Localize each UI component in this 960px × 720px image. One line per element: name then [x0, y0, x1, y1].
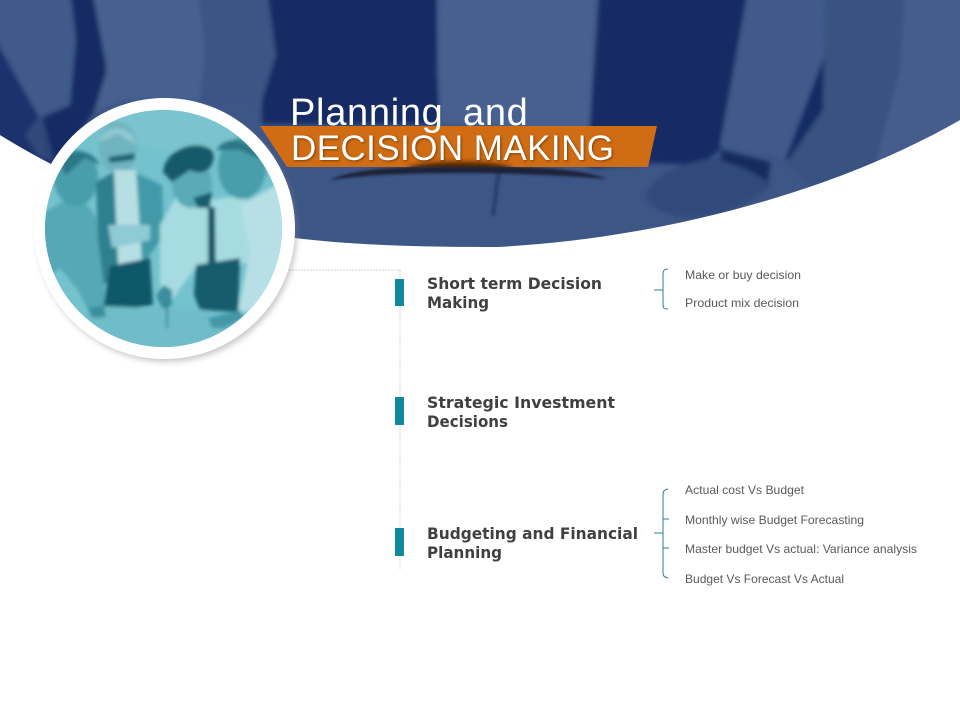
item 3: budgeting and financial planning: Budgeting and Financial [427, 524, 638, 543]
item 3: budgeting and financial planning [395, 524, 638, 562]
sub-items 3: Master budget Vs actual: Variance analysis [685, 542, 917, 556]
left man [45, 201, 106, 310]
sub-items 1: Product mix decision [685, 296, 799, 310]
title text: DECISION MAKING [291, 129, 614, 168]
bracket 3 [654, 489, 669, 578]
centre dark figure [262, 0, 440, 124]
left paper [0, 0, 78, 115]
item 2: strategic investment decisions: Decisions [427, 412, 508, 431]
woman [99, 122, 137, 174]
item 2: strategic investment decisions [395, 393, 615, 431]
item 1: short term decision making: Short term Decision [427, 274, 602, 293]
right dark figure [590, 0, 748, 168]
sub-items 1 [685, 268, 801, 310]
sleeve [720, 0, 825, 158]
sub-items 3 [685, 483, 917, 586]
sub-items 1: Make or buy decision [685, 268, 801, 282]
sub-items 3: Monthly wise Budget Forecasting [685, 513, 864, 527]
sub-items 3: Budget Vs Forecast Vs Actual [685, 572, 844, 586]
item 1: short term decision making: Making [427, 293, 489, 312]
table [85, 306, 230, 350]
item 3: budgeting and financial planning: Planning [427, 543, 502, 562]
item 2: strategic investment decisions: Strategic Investment [427, 393, 615, 412]
banner photo background [0, 0, 960, 260]
connector lines [280, 270, 400, 570]
right man [218, 137, 266, 199]
light jacket and sleeve [92, 0, 205, 112]
title text: Planning [290, 92, 444, 134]
sub-items 3: Actual cost Vs Budget [685, 483, 805, 497]
title ribbon [260, 126, 657, 180]
title text [290, 92, 614, 168]
ribbon shadow [330, 166, 607, 180]
circular team photo [34, 98, 297, 362]
pen [491, 173, 501, 216]
centre man [160, 190, 258, 300]
item 1: short term decision making [395, 274, 602, 312]
dark vest [42, 0, 107, 165]
bracket 1 [654, 269, 668, 309]
title text: and [463, 92, 529, 134]
hand and watch [645, 158, 772, 218]
